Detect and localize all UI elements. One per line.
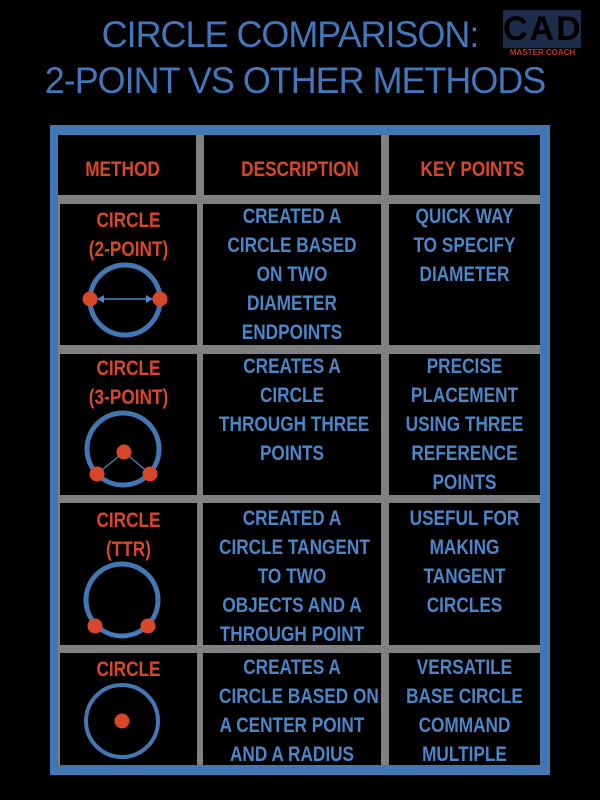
row2 method: CIRCLE: [96, 357, 161, 380]
row1 description: ENDPOINTS: [242, 321, 342, 344]
row3 description: [219, 507, 370, 646]
row1 description: CREATED A: [243, 205, 341, 228]
row2 description: THROUGH THREE: [219, 413, 369, 436]
row3 method: [96, 509, 161, 561]
row2 key points: PRECISE: [427, 355, 502, 378]
title: [45, 14, 545, 101]
row3 key points: TANGENT: [424, 565, 505, 588]
row3 key points: MAKING: [430, 536, 499, 559]
row4 description: AND A RADIUS: [230, 743, 354, 766]
row3 key points: [410, 507, 519, 617]
row1 key points: TO SPECIFY: [413, 234, 516, 257]
row3 description: THROUGH POINT: [220, 623, 364, 646]
row4 key points: [406, 656, 523, 766]
row3 description: CIRCLE TANGENT: [219, 536, 370, 559]
row4 description: [219, 656, 379, 766]
logo: CAD: [503, 10, 583, 48]
header: key points: KEY POINTS: [421, 158, 524, 181]
row2 description: CREATES A: [243, 355, 341, 378]
row4 key points: BASE CIRCLE: [406, 685, 523, 708]
row3 key points: CIRCLES: [427, 594, 502, 617]
row2 description: POINTS: [260, 442, 324, 465]
icon: center-radius circle: [84, 683, 160, 759]
title: CIRCLE COMPARISON:: [102, 14, 478, 55]
row4 key points: COMMAND: [419, 714, 510, 737]
header: method: METHOD: [85, 158, 160, 181]
row2 key points: USING THREE: [406, 413, 523, 436]
row1 key points: [413, 205, 516, 286]
row4 description: CREATES A: [243, 656, 341, 679]
row2 description: CIRCLE: [260, 384, 324, 407]
row3 method: CIRCLE: [96, 509, 161, 532]
row1 method: (2-POINT): [89, 238, 168, 261]
row4 method: CIRCLE: [96, 658, 161, 681]
row4 description: CIRCLE BASED ON: [219, 685, 379, 708]
icon: 2-point circle: [82, 262, 168, 338]
logo: MASTER COACH: [510, 48, 575, 57]
row4 description: A CENTER POINT: [220, 714, 364, 737]
row2 method: [89, 357, 168, 409]
row2 key points: [406, 355, 523, 494]
icon: TTR circle: [84, 562, 160, 638]
row1 method: CIRCLE: [96, 209, 161, 232]
row1 key points: DIAMETER: [420, 263, 509, 286]
row2 description: [219, 355, 369, 465]
row1 description: ON TWO: [257, 263, 327, 286]
row1 description: CIRCLE BASED: [227, 234, 357, 257]
row4 key points: VERSATILE: [417, 656, 512, 679]
row1 method: [89, 209, 168, 261]
icon: 3-point circle: [84, 410, 162, 488]
row2 key points: POINTS: [432, 471, 497, 494]
row3 description: TO TWO: [258, 565, 326, 588]
grid cells (black): [58, 135, 196, 195]
row3 method: (TTR): [106, 538, 151, 561]
row1 key points: QUICK WAY: [416, 205, 513, 228]
row3 description: OBJECTS AND A: [222, 594, 362, 617]
row3 description: CREATED A: [243, 507, 341, 530]
row2 key points: REFERENCE: [411, 442, 518, 465]
row2 method: (3-POINT): [89, 386, 168, 409]
row3 key points: USEFUL FOR: [410, 507, 519, 530]
row1 description: DIAMETER: [247, 292, 337, 315]
row1 description: [227, 205, 357, 344]
row2 key points: PLACEMENT: [411, 384, 518, 407]
header: description: DESCRIPTION: [241, 158, 359, 181]
table: [50, 125, 550, 775]
row4 key points: MULTIPLE: [422, 743, 507, 766]
title: 2-POINT VS OTHER METHODS: [45, 60, 545, 101]
